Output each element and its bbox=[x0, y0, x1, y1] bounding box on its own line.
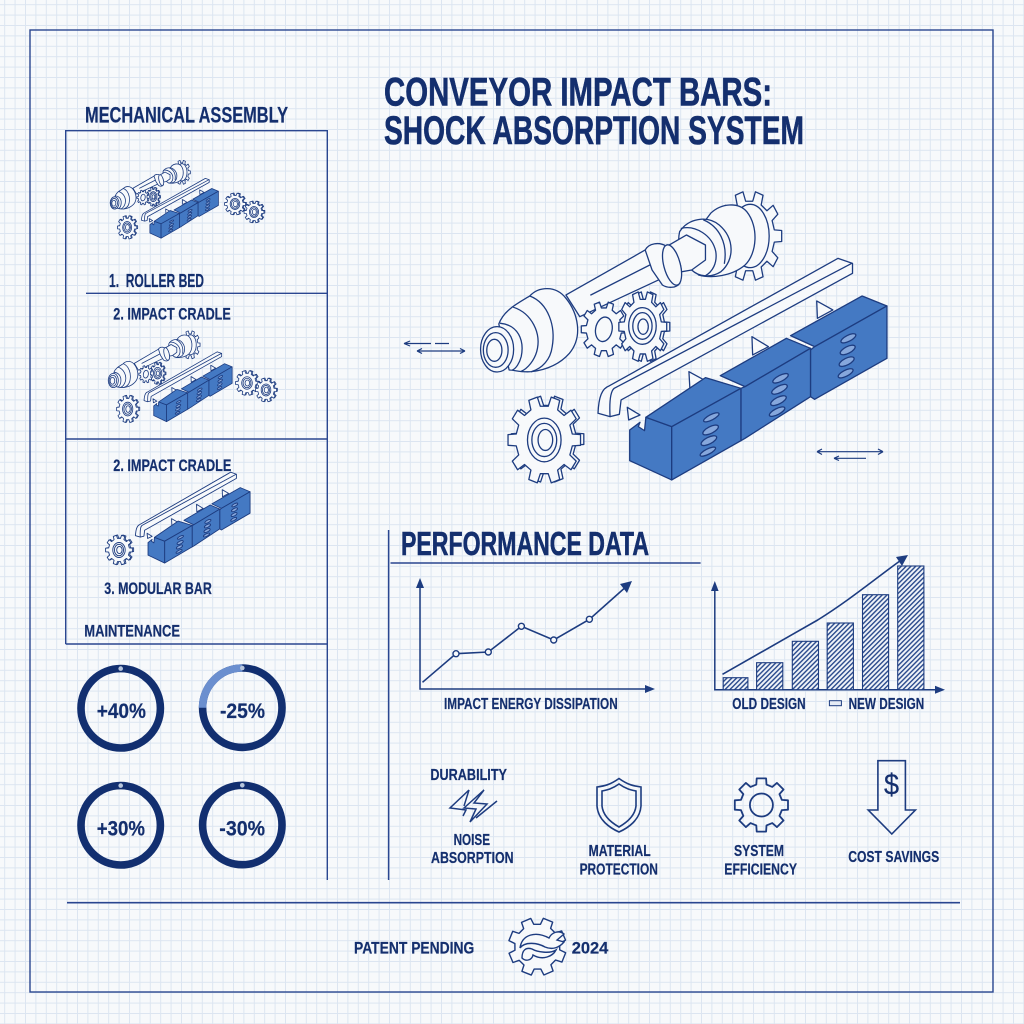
bar chart: old vs new design: NEW DESIGN bbox=[849, 696, 924, 713]
label: impact cradle: 2. IMPACT CRADLE bbox=[113, 304, 231, 324]
main exploded assembly illustration bbox=[481, 192, 887, 483]
heading: mechanical assembly: MECHANICAL ASSEMBLY bbox=[85, 102, 288, 128]
ring: -30% bbox=[203, 783, 282, 865]
benefit: material protection bbox=[580, 778, 658, 879]
panel: mechanical assembly bbox=[66, 102, 327, 880]
footer bbox=[67, 903, 960, 984]
benefit: system efficiency bbox=[724, 778, 798, 879]
benefit: material protection: MATERIAL bbox=[589, 843, 651, 860]
icon: gear with wrench bbox=[500, 910, 574, 984]
benefit: durability and noise absorption bbox=[430, 767, 514, 867]
heading: performance data: PERFORMANCE DATA bbox=[401, 525, 649, 562]
benefit: system efficiency: EFFICIENCY bbox=[724, 862, 798, 879]
ring: -25% bbox=[203, 666, 282, 747]
icon: down arrow with dollar: $ bbox=[884, 768, 899, 802]
ring: +30%: +30% bbox=[97, 818, 145, 840]
title: SHOCK ABSORPTION SYSTEM bbox=[384, 109, 804, 153]
ring: +30% bbox=[81, 783, 160, 865]
label: maintenance: MAINTENANCE bbox=[84, 622, 180, 640]
icon: gear bbox=[735, 778, 788, 832]
benefit: cost savings bbox=[848, 761, 939, 866]
footer label: year: 2024 bbox=[572, 938, 609, 957]
bar chart: old vs new design: OLD DESIGN bbox=[732, 696, 806, 713]
icon: shield bbox=[597, 778, 641, 832]
mini diagram: roller bed bbox=[110, 160, 265, 239]
mini diagram: modular bar bbox=[106, 472, 250, 565]
motion arrows: right bbox=[817, 449, 883, 460]
title: CONVEYOR IMPACT BARS: bbox=[384, 70, 772, 114]
label: modular bar: 3. MODULAR BAR bbox=[104, 579, 212, 598]
label: roller bed: 1. ROLLER BED bbox=[109, 271, 204, 291]
ring: +40%: +40% bbox=[97, 700, 146, 723]
panel: performance data bbox=[389, 525, 945, 880]
bar chart: old vs new design bbox=[711, 555, 945, 713]
ring: -30%: -30% bbox=[219, 818, 265, 840]
benefit: durability and noise absorption: DURABILITY bbox=[430, 767, 508, 784]
footer label: patent pending: PATENT PENDING bbox=[354, 938, 474, 957]
benefit: durability and noise absorption: ABSORPTION bbox=[431, 850, 514, 867]
line chart: impact energy dissipation: IMPACT ENERGY DISSIPATION bbox=[444, 696, 618, 713]
title bbox=[384, 70, 804, 153]
mini diagram: impact cradle bbox=[108, 331, 277, 423]
line chart: impact energy dissipation bbox=[416, 578, 655, 713]
benefit: cost savings: COST SAVINGS bbox=[848, 849, 939, 866]
icon: lightning bolts bbox=[450, 790, 497, 822]
benefit: system efficiency: SYSTEM bbox=[734, 843, 784, 860]
motion arrows: left bbox=[404, 341, 465, 354]
benefit: material protection: PROTECTION bbox=[580, 862, 658, 879]
benefit: durability and noise absorption: NOISE bbox=[454, 832, 490, 849]
ring: -25%: -25% bbox=[220, 700, 265, 723]
ring stats bbox=[81, 666, 282, 865]
label: impact cradle second: 2. IMPACT CRADLE bbox=[113, 456, 231, 475]
ring: +40% bbox=[81, 666, 160, 748]
